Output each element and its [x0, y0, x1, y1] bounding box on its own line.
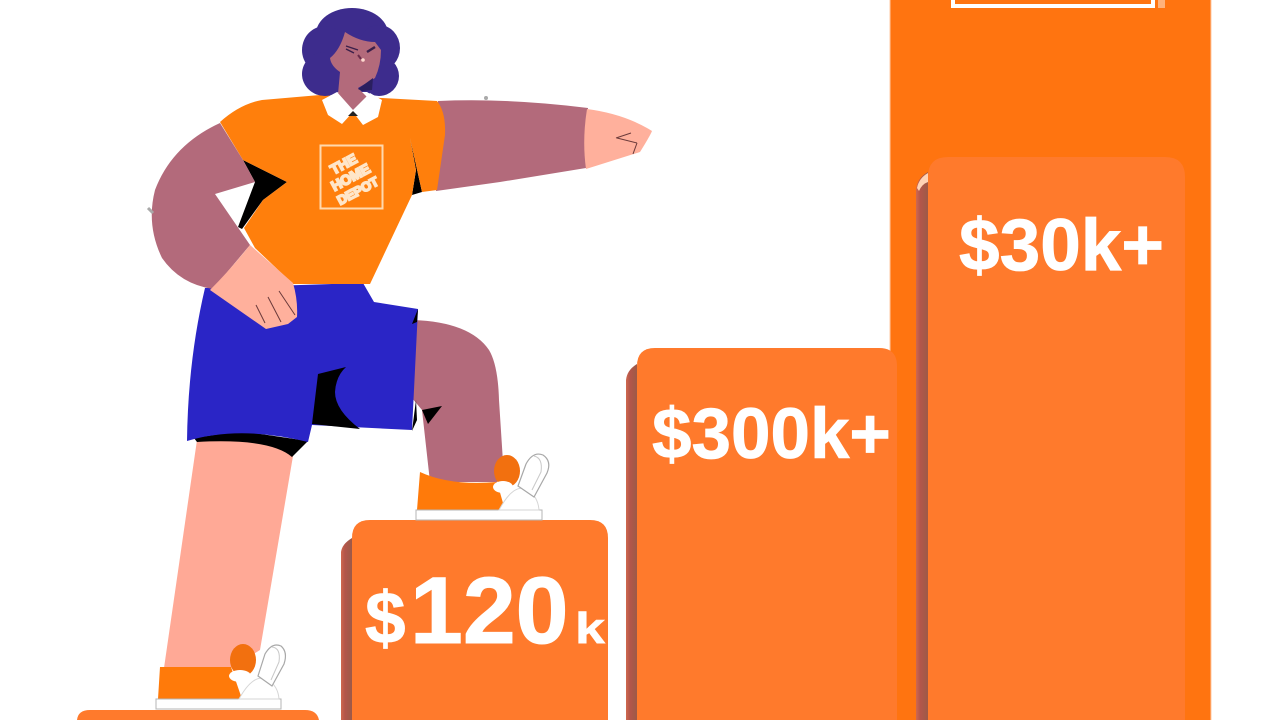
step 2: $120k: 120 — [410, 558, 569, 664]
shirt logo — [320, 146, 382, 208]
step 2: $120k: $ — [365, 578, 406, 659]
step 4: $30k+ — [916, 157, 1185, 720]
armpit shadows — [238, 160, 287, 229]
step 2: $120k — [341, 520, 608, 720]
shoe: front foot — [416, 454, 549, 520]
character: woman stepping up — [148, 8, 652, 709]
face — [330, 32, 381, 112]
hand on hip — [210, 245, 297, 329]
step 4: $30k+: $30k+ — [959, 205, 1164, 286]
front leg — [164, 436, 293, 668]
shirt — [220, 95, 445, 284]
shorts — [187, 283, 418, 442]
pointing hand — [584, 109, 652, 169]
bent leg — [412, 320, 503, 482]
hip arm — [152, 123, 255, 289]
tall back column — [890, 0, 1212, 720]
shirt logo: THE — [327, 150, 360, 178]
step 3: $300k+: $300k+ — [652, 395, 891, 474]
hair — [302, 8, 400, 96]
step 3: $300k+ — [626, 348, 897, 720]
shorts shadow — [194, 431, 308, 457]
pointing arm — [436, 100, 588, 191]
shirt logo: DEPOT — [335, 174, 381, 208]
shoe: back foot — [156, 644, 285, 709]
shorts inner shadow — [312, 367, 360, 429]
shirt logo: HOME — [328, 160, 373, 194]
step 1 — [77, 710, 319, 720]
step 2: $120k: k — [575, 604, 606, 653]
collar — [322, 92, 382, 125]
